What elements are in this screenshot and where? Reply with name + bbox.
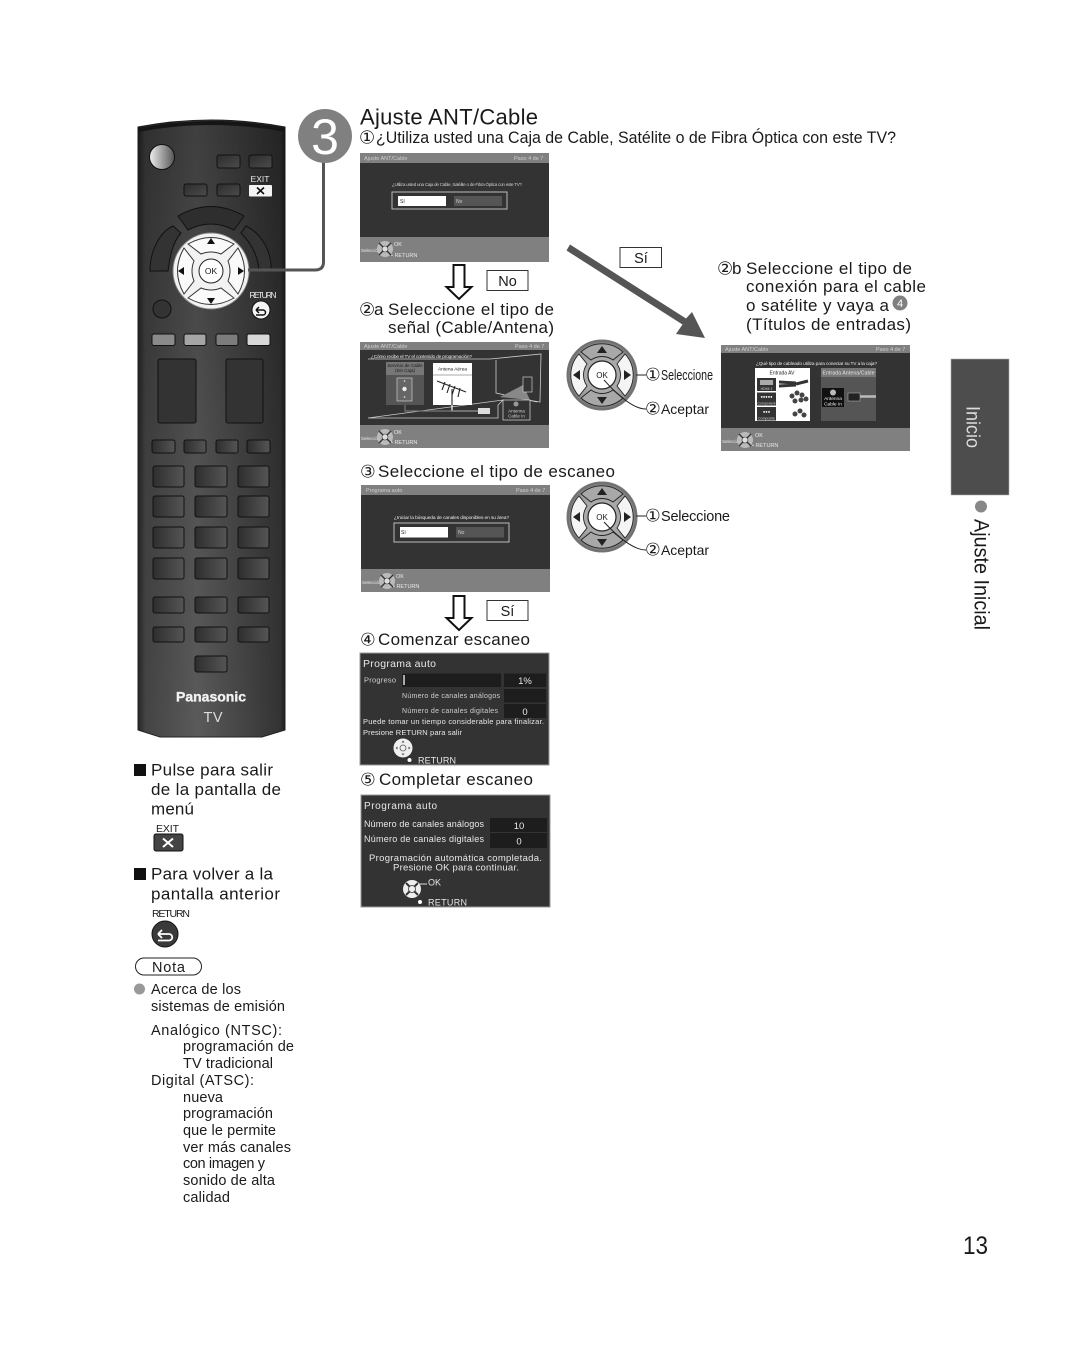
screen 6: scan complete <box>361 795 550 908</box>
brand: Panasonic <box>176 688 246 704</box>
note text: ver más canales <box>183 1140 291 1156</box>
tip: return: pantalla anterior <box>151 884 280 904</box>
section title: Ajuste Inicial <box>970 519 992 630</box>
remote top edge <box>138 121 285 132</box>
screen 1: cable box question: Paso 4 de 7 <box>514 156 543 162</box>
step 2a heading <box>359 300 554 337</box>
yes box 2 <box>487 600 528 620</box>
screen 2: signal type <box>360 342 549 448</box>
screen 4: scan search: OK <box>396 574 404 580</box>
screen 5: scan progress: Progreso <box>364 676 396 684</box>
tip: exit <box>134 760 281 818</box>
number keypad <box>153 466 269 672</box>
d-pad 2 labels: ② <box>645 540 661 560</box>
screen 3: connection type: Entrada Antena/Cable <box>822 370 875 376</box>
step 5 heading: Completar escaneo <box>379 770 533 789</box>
remote control <box>138 120 285 737</box>
screen 5: scan progress: Número de canales digitales <box>402 708 498 715</box>
screen 1: cable box question: OK <box>394 242 402 248</box>
screen 6: scan complete: Programa auto <box>364 801 437 812</box>
screen 5: scan progress: Programa auto <box>363 658 436 670</box>
exit label: EXIT <box>251 174 269 184</box>
step 3 badge <box>298 109 352 165</box>
screen 4: scan search: • RETURN <box>393 584 419 590</box>
screen 4: scan search: Programa auto <box>366 488 402 494</box>
screen 3: connection type: Selección <box>722 439 742 444</box>
step 4 heading: Comenzar escaneo <box>378 630 530 649</box>
note text: que le permite <box>183 1123 276 1139</box>
colour buttons <box>152 334 270 346</box>
step 2b heading: Seleccione el tipo de <box>746 259 912 278</box>
d-pad 2 labels: ① <box>645 506 661 526</box>
note text: programación <box>183 1106 273 1122</box>
upper buttons <box>184 155 272 196</box>
remote body <box>138 120 285 737</box>
tip: exit: menú <box>151 800 194 818</box>
section tab: Inicio <box>962 406 982 448</box>
screen 1: cable box question: Sí <box>400 199 405 205</box>
screen 4: scan search: Sí <box>401 530 406 536</box>
step 2a heading: ② <box>359 300 375 320</box>
screen 4: scan search: Paso 4 de 7 <box>516 488 545 494</box>
screen 3: connection type: ●●●●● <box>760 394 773 399</box>
screen 1: cable box question <box>360 153 549 262</box>
screen 6: scan complete: Número de canales digitales <box>364 834 484 844</box>
d-pad 1 labels: ② <box>645 398 661 418</box>
screen 1: cable box question: ¿Utiliza usted una Caja de Cable, Satélite o de Fibra Óptica con este TV? <box>392 181 522 187</box>
return icon <box>152 921 178 947</box>
screen 2: signal type: Ajuste ANT/Cable <box>364 344 407 350</box>
return label: RETURN <box>250 290 276 300</box>
step 3 scan heading: ③ <box>360 462 376 482</box>
d-pad 1 labels <box>604 364 713 418</box>
step 2a heading: a <box>374 300 384 319</box>
down arrow: yes <box>446 596 472 630</box>
screen 3: connection type: Ajuste ANT/Cable <box>725 347 768 353</box>
step 2b heading: (Títulos de entradas) <box>746 315 911 334</box>
screen 3: connection type: Composite <box>758 416 775 420</box>
yes box <box>620 248 662 268</box>
navigation wheel: OK <box>205 266 217 276</box>
screen 1: cable box question: No <box>456 199 463 205</box>
note text: Analógico (NTSC): <box>151 1023 282 1039</box>
tip: exit: de la pantalla de <box>151 780 281 799</box>
function buttons <box>152 440 270 453</box>
screen 3: connection type: Antenna <box>824 396 842 402</box>
d-pad 2 labels: Aceptar <box>661 542 709 558</box>
screen 3: connection type: Entrada AV <box>770 370 795 376</box>
tall rocker buttons <box>158 359 263 423</box>
step 2b heading <box>717 258 926 334</box>
screen 2: signal type: Cable In <box>508 414 525 418</box>
step 2a heading: Seleccione el tipo de <box>388 300 554 319</box>
step 2b heading: 4 <box>897 298 903 310</box>
screen 3: connection type: OK <box>755 433 763 439</box>
screen 2: signal type: Servicio de Cable <box>387 363 423 368</box>
screen 2: signal type: • RETURN <box>391 440 417 446</box>
d-pad 1 labels: Seleccione <box>661 367 713 384</box>
screen 3: connection type: ●●● <box>763 409 771 414</box>
step 2a heading: señal (Cable/Antena) <box>388 318 554 337</box>
d-pad 1 labels: ① <box>645 364 661 384</box>
screen 3: connection type: HDMI 1 <box>761 387 772 391</box>
note text: programación de <box>183 1039 294 1055</box>
step 2b heading: conexión para el cable <box>746 277 926 296</box>
d-pad 2 labels <box>604 506 730 560</box>
screen 6: scan complete: 0 <box>516 836 522 848</box>
screen 3: connection type: ¿Qué tipo de cableado utiliza para conectar su TV a la caja? <box>756 361 877 367</box>
note text: calidad <box>183 1190 230 1206</box>
down arrow: no <box>446 265 472 299</box>
no box <box>487 270 528 290</box>
note text: con imagen y <box>183 1156 266 1172</box>
note text: Acerca de los <box>151 982 241 998</box>
d-pad 1: OK <box>596 371 608 380</box>
step 4 heading: ④ <box>360 630 376 650</box>
round button <box>153 300 171 318</box>
screen 6: scan complete: Número de canales análogos <box>364 819 484 829</box>
screen 6: scan complete: 10 <box>514 821 524 832</box>
return label: RETURN <box>152 908 190 920</box>
screen 5: scan progress: Número de canales análogos <box>402 693 500 700</box>
screen 4: scan search: Selección <box>362 580 382 585</box>
note badge <box>136 958 202 976</box>
remote body shading <box>138 120 285 737</box>
exit icon <box>154 834 183 851</box>
note text: nueva <box>183 1090 224 1106</box>
screen 3: connection type: Component <box>757 402 776 406</box>
screen 1: cable box question: Selección <box>361 248 381 253</box>
screen 6: scan complete: Presione OK para continuar. <box>393 862 519 874</box>
d-pad 1 <box>567 340 637 410</box>
screen 2: signal type: OK <box>394 430 402 436</box>
exit label: EXIT <box>156 823 180 835</box>
screen 6: scan complete: Programación automática completada. <box>369 853 542 864</box>
note text: Digital (ATSC): <box>151 1073 254 1089</box>
diagonal arrow <box>566 244 705 338</box>
step 3 badge: 3 <box>311 109 339 165</box>
d-pad 1 labels: Aceptar <box>661 401 709 417</box>
screen 3: connection type: • RETURN <box>752 443 778 449</box>
screen 2: signal type: Antenna <box>508 408 525 414</box>
connector line from step 3 to wheel <box>248 160 324 270</box>
tip: exit: Pulse para salir <box>151 760 273 780</box>
step 2b heading: o satélite y vaya a <box>746 296 890 315</box>
screen 3: connection type: Cable In <box>824 402 842 408</box>
section tab <box>951 359 1009 495</box>
screen 5: scan progress: RETURN <box>418 756 456 766</box>
d-pad 2 labels: Seleccione <box>661 509 730 525</box>
exit button <box>249 185 272 196</box>
screen 2: signal type: Antena Aérea <box>438 366 467 372</box>
screen 4: scan search <box>361 485 550 592</box>
yes box: Sí <box>634 251 648 267</box>
question: ¿Utiliza usted una Caja de Cable, Satélite o de Fibra Óptica con este TV? <box>376 128 896 147</box>
screen 2: signal type: Paso 4 de 7 <box>515 344 544 350</box>
screen 6: scan complete: OK <box>428 878 441 888</box>
screen 3: connection type <box>721 345 910 451</box>
d-pad 2 <box>567 482 637 552</box>
note text <box>134 982 294 1206</box>
TV label: TV <box>204 710 223 726</box>
step 5 heading: ⑤ <box>360 770 376 790</box>
power button <box>150 144 174 170</box>
screen 2: signal type: (Sin Caja) <box>395 368 415 373</box>
tip: return: Para volver a la <box>151 864 274 884</box>
step 3 scan heading: Seleccione el tipo de escaneo <box>378 462 615 481</box>
screen 5: scan progress: 0 <box>522 707 528 718</box>
question: ① <box>359 128 375 148</box>
screen 5: scan progress <box>360 653 549 766</box>
navigation wheel <box>173 233 249 309</box>
section dot <box>975 500 987 512</box>
note text: sistemas de emisión <box>151 999 285 1015</box>
step 2b heading: b <box>732 259 741 278</box>
title: Ajuste ANT/Cable <box>360 104 538 130</box>
screen 5: scan progress: 1% <box>518 676 532 687</box>
note text: sonido de alta <box>183 1173 276 1189</box>
d-pad 2: OK <box>596 513 608 522</box>
screen 4: scan search: No <box>458 530 465 536</box>
step 2b heading: ② <box>717 258 733 278</box>
screen 1: cable box question: Ajuste ANT/Cable <box>364 156 407 162</box>
return button <box>252 301 270 319</box>
screen 1: cable box question: • RETURN <box>391 253 417 259</box>
screen 2: signal type: ¿Cómo recibe el TV el contenido de programación? <box>371 354 472 360</box>
screen 2: signal type: Selección <box>361 436 381 441</box>
screen 5: scan progress: Presione RETURN para salir <box>363 728 462 737</box>
page number: 13 <box>963 1232 988 1260</box>
screen 4: scan search: ¿Iniciar la búsqueda de canales disponibles en su área? <box>394 515 509 521</box>
screen 6: scan complete: RETURN <box>428 898 467 908</box>
note badge: Nota <box>152 960 186 976</box>
arc buttons <box>150 206 271 271</box>
no box: No <box>498 274 517 290</box>
tip: return <box>134 864 280 904</box>
screen 5: scan progress: Puede tomar un tiempo considerable para finalizar. <box>363 717 544 726</box>
screen 3: connection type: Paso 4 de 7 <box>876 347 905 353</box>
yes box 2: Sí <box>501 604 514 620</box>
note text: TV tradicional <box>183 1056 273 1072</box>
